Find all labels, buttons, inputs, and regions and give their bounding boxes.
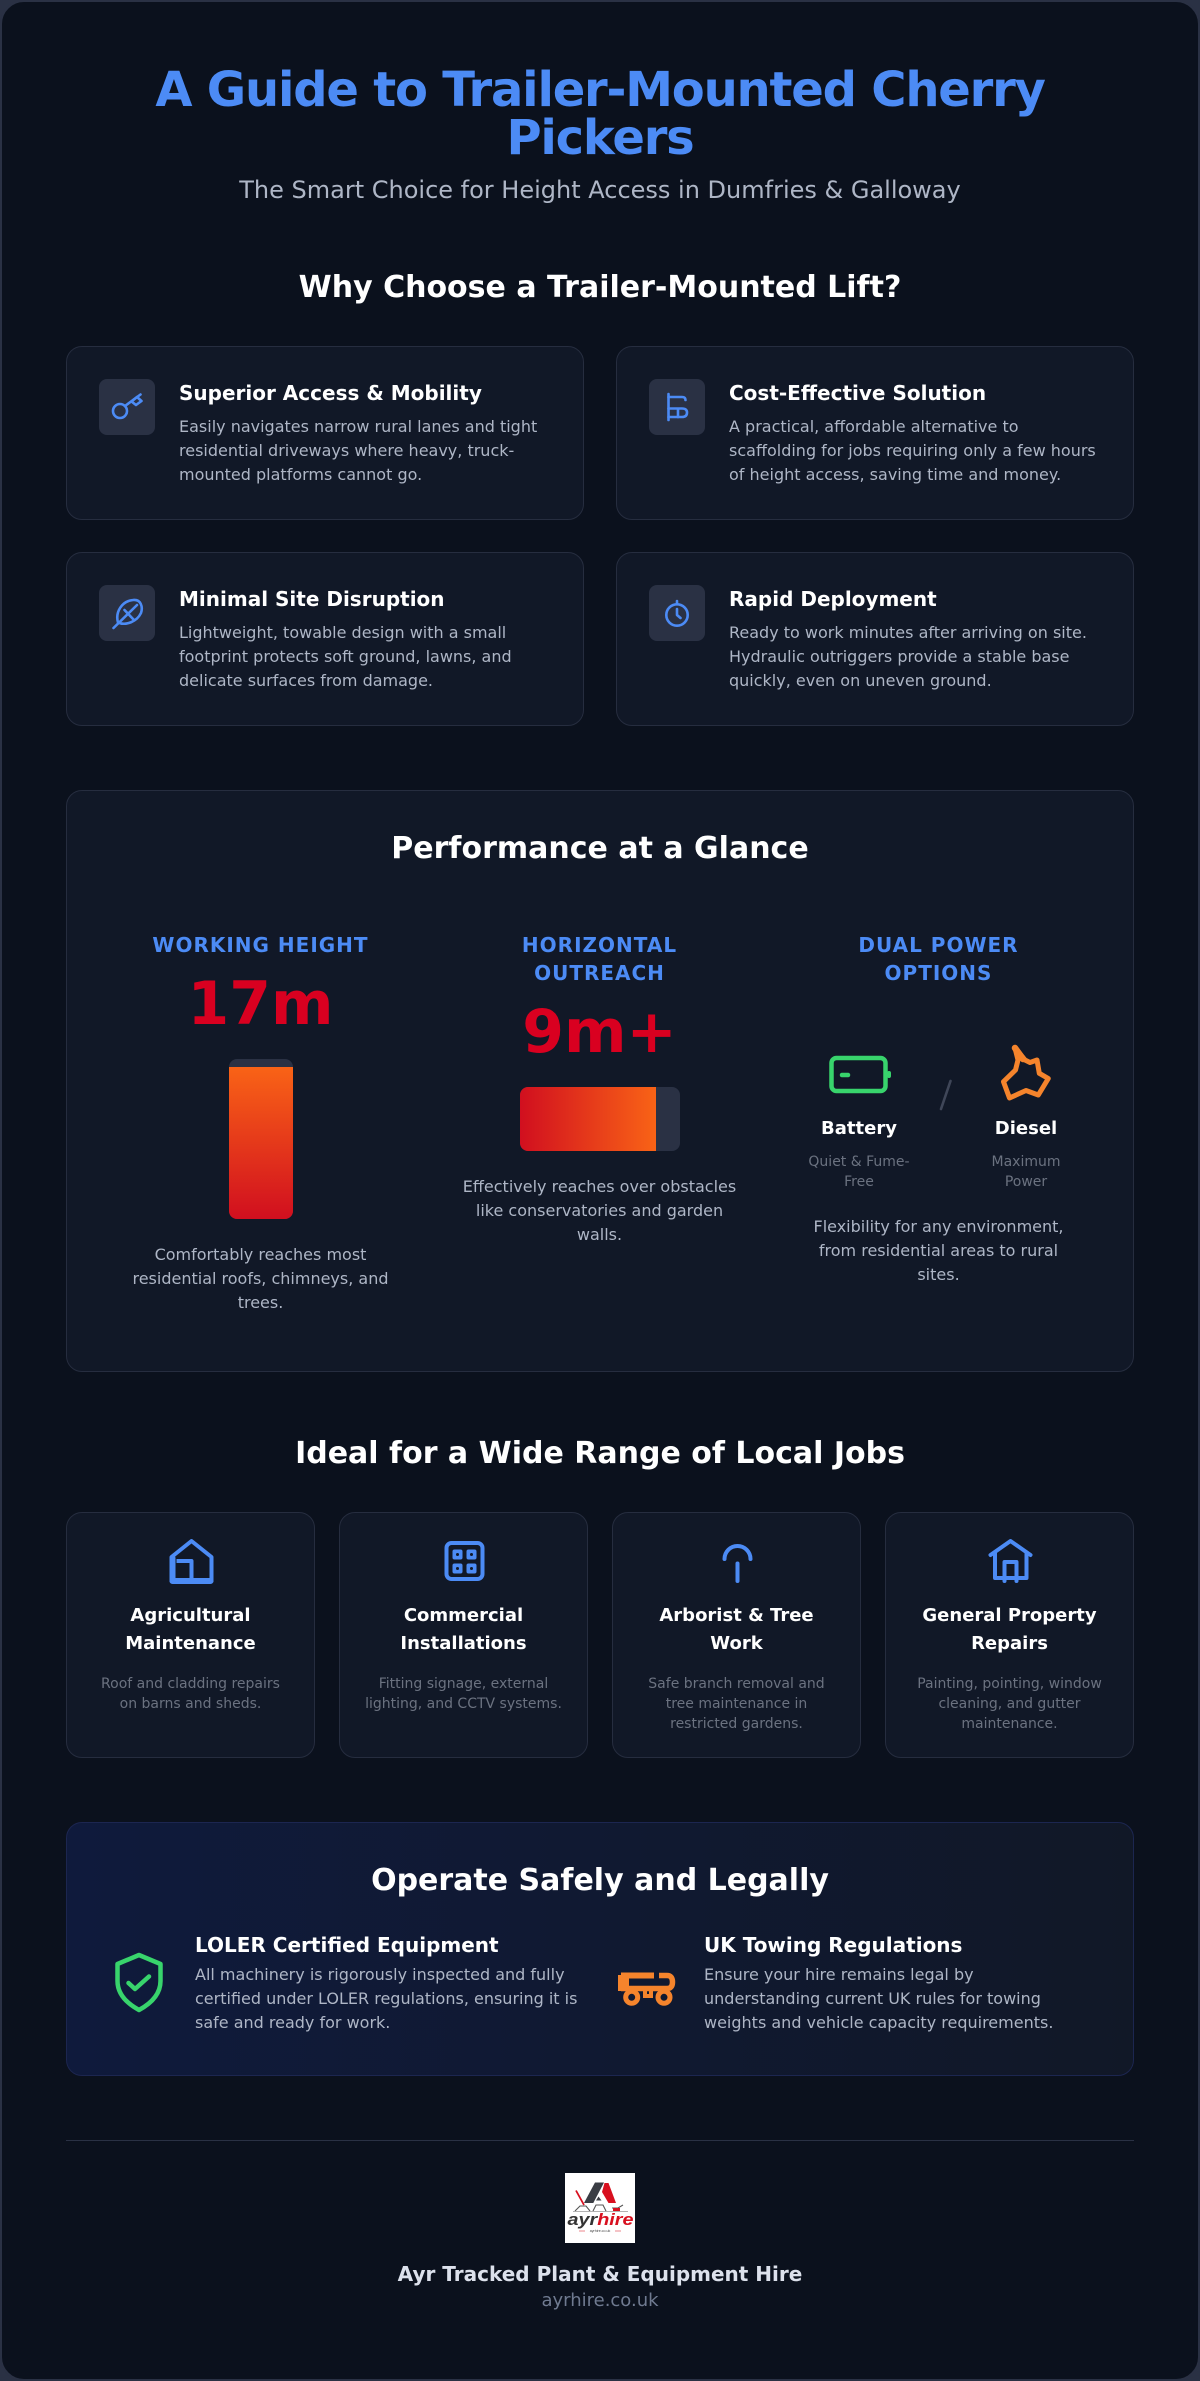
icon: tow vehicle [618, 1972, 676, 2006]
battery note [808, 1154, 910, 1190]
company name: Ayr Tracked Plant & Equipment Hire [398, 2262, 802, 2286]
card heading: Cost-Effective Solution [729, 381, 986, 405]
job text: cleaning, and gutter [938, 1696, 1081, 1712]
horizontal bar [520, 1086, 680, 1150]
description: from residential areas to rural [819, 1241, 1058, 1260]
description: Comfortably reaches most [155, 1244, 366, 1264]
card text: quickly, even on uneven ground. [729, 670, 992, 690]
job title: Work [710, 1632, 763, 1654]
website: ayrhire.co.uk [541, 2290, 659, 2310]
panel: superior access card [66, 346, 584, 520]
description: like conservatories and garden [476, 1200, 723, 1220]
panel: operate safely and legally [66, 1822, 1134, 2076]
job title: Repairs [971, 1632, 1048, 1654]
icon: key [99, 379, 155, 435]
card text [179, 416, 537, 484]
job text: Safe branch removal and [648, 1676, 825, 1692]
icon: shield [115, 1952, 163, 2012]
card heading: Superior Access & Mobility [179, 381, 482, 405]
number: 9m+ [522, 997, 677, 1067]
job title: Agricultural [130, 1604, 251, 1626]
battery note: Free [844, 1174, 874, 1190]
job text: on barns and sheds. [120, 1696, 261, 1712]
panel: performance at a glance [66, 790, 1134, 1372]
battery note: Quiet & Fume- [808, 1154, 910, 1170]
job text: lighting, and CCTV systems. [365, 1696, 562, 1712]
icon: stopwatch [649, 585, 705, 641]
towing title: UK Towing Regulations [704, 1932, 962, 1956]
diesel note [992, 1154, 1060, 1190]
stat: dual power options [808, 933, 1064, 1284]
label: DUAL POWER [858, 933, 1019, 957]
job text: restricted gardens. [670, 1716, 803, 1732]
job title [922, 1604, 1097, 1654]
job text [365, 1676, 562, 1712]
card text: Easily navigates narrow rural lanes and tight [179, 416, 537, 436]
panel: agricultural job card [66, 1512, 315, 1758]
towing text: understanding current UK rules for towing [704, 1989, 1041, 2008]
card heading: Minimal Site Disruption [179, 587, 445, 611]
title: A Guide to Trailer-Mounted Cherry [155, 62, 1045, 118]
label: OPTIONS [885, 961, 992, 985]
card text: residential driveways where heavy, truck- [179, 440, 514, 460]
job title: Arborist & Tree [659, 1604, 814, 1626]
stat: horizontal outreach [463, 933, 736, 1244]
description: trees. [238, 1292, 283, 1312]
panel: minimal disruption card [66, 552, 584, 726]
LOLER text: certified under LOLER regulations, ensuring it is [195, 1989, 577, 2008]
LOLER title: LOLER Certified Equipment [195, 1932, 499, 1956]
stat: working height [132, 933, 389, 1312]
footer [66, 2140, 1134, 2320]
card text: scaffolding for jobs requiring only a few hours [729, 440, 1096, 460]
logo [565, 2173, 635, 2243]
towing text [704, 1965, 1053, 2032]
battery label: Battery [821, 1118, 897, 1139]
icon: building grid [444, 1541, 484, 1581]
description: walls. [577, 1224, 622, 1244]
job title [659, 1604, 814, 1654]
job text: tree maintenance in [666, 1696, 807, 1712]
job title [125, 1604, 256, 1654]
panel: rapid deployment card [616, 552, 1134, 726]
card text [179, 622, 512, 690]
description: residential roofs, chimneys, and [132, 1268, 389, 1288]
job title: General Property [922, 1604, 1097, 1626]
icon: house [988, 1539, 1033, 1583]
card text: Ready to work minutes after arriving on site. [729, 622, 1087, 642]
card text: Lightweight, towable design with a small [179, 622, 506, 642]
diesel note: Maximum [992, 1154, 1060, 1170]
label: HORIZONTAL [522, 933, 677, 957]
job text [101, 1676, 280, 1712]
description [132, 1244, 389, 1312]
vertical bar [228, 1059, 292, 1219]
job title: Commercial [404, 1604, 523, 1626]
icon: barn [170, 1539, 214, 1584]
heading: performance: Performance at a Glance [391, 831, 809, 866]
card text [729, 622, 1087, 690]
label [522, 933, 677, 985]
towing text: Ensure your hire remains legal by [704, 1965, 974, 1984]
card text: A practical, affordable alternative to [729, 416, 1018, 436]
icon: scaffold [649, 379, 705, 435]
job text [917, 1676, 1102, 1732]
title [155, 62, 1045, 166]
heading: why choose: Why Choose a Trailer-Mounted Lift? [299, 270, 901, 305]
logo: ayrhire.co.uk [590, 2228, 610, 2232]
panel: commercial job card [339, 1512, 588, 1758]
job title [400, 1604, 527, 1654]
card text: footprint protects soft ground, lawns, and [179, 646, 512, 666]
job text: Roof and cladding repairs [101, 1676, 280, 1692]
job text: Fitting signage, external [379, 1676, 548, 1692]
card text: mounted platforms cannot go. [179, 464, 422, 484]
logo: ayr hire [568, 2210, 634, 2228]
heading: local jobs: Ideal for a Wide Range of Local Jobs [295, 1436, 905, 1470]
number: 17m [187, 969, 334, 1039]
card text: of height access, saving time and money. [729, 464, 1061, 484]
title: Pickers [506, 110, 694, 166]
job title: Installations [400, 1632, 527, 1654]
description [463, 1176, 736, 1244]
description: sites. [917, 1265, 960, 1284]
towing text: weights and vehicle capacity requirements. [704, 2013, 1053, 2032]
job title: Maintenance [125, 1632, 256, 1654]
description: Flexibility for any environment, [813, 1217, 1064, 1236]
label: OUTREACH [534, 961, 665, 985]
label [858, 933, 1019, 985]
panel: property job card [885, 1512, 1134, 1758]
heading: safety: Operate Safely and Legally [371, 1862, 829, 1898]
job text [648, 1676, 825, 1732]
icon: flame [1001, 1044, 1051, 1100]
diesel note: Power [1005, 1174, 1047, 1190]
icon: tree arc [722, 1544, 752, 1583]
card text: Hydraulic outriggers provide a stable base [729, 646, 1069, 666]
job text: maintenance. [961, 1716, 1058, 1732]
icon: feather [99, 585, 155, 641]
icon: battery [829, 1056, 891, 1094]
diesel label: Diesel [995, 1118, 1057, 1139]
description: Effectively reaches over obstacles [463, 1176, 736, 1196]
LOLER text: safe and ready for work. [195, 2013, 390, 2032]
slash divider [940, 1080, 952, 1110]
card text [729, 416, 1096, 484]
label: WORKING HEIGHT [152, 933, 369, 957]
job text: Painting, pointing, window [917, 1676, 1102, 1692]
panel: cost-effective card [616, 346, 1134, 520]
card text: delicate surfaces from damage. [179, 670, 433, 690]
card heading: Rapid Deployment [729, 587, 937, 611]
description [813, 1217, 1064, 1284]
LOLER text [195, 1965, 577, 2032]
LOLER text: All machinery is rigorously inspected and fully [195, 1965, 565, 1984]
panel: arborist job card [612, 1512, 861, 1758]
subtitle: The Smart Choice for Height Access in Dumfries & Galloway [239, 176, 961, 204]
